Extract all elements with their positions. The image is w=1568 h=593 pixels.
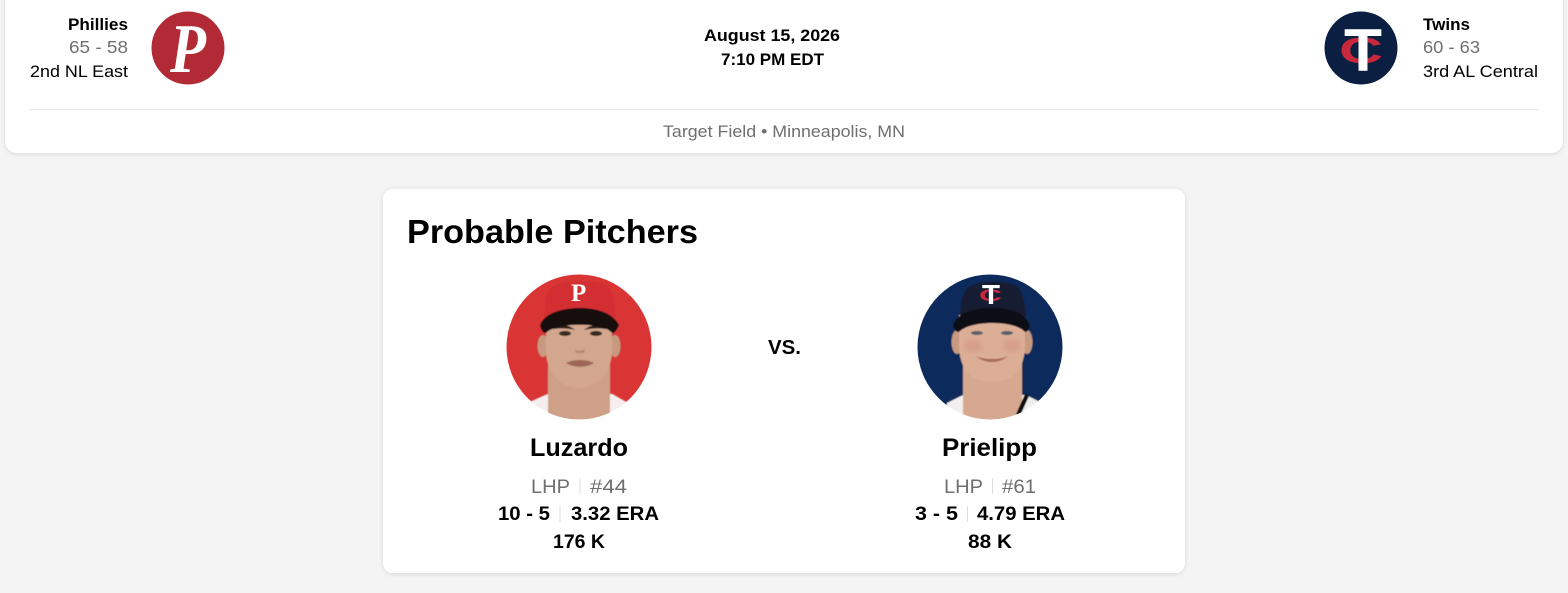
icon: Phillies logo: P [169,11,207,88]
pitcher details: Luzardo: 176 K [553,531,605,553]
pitcher details: Luzardo: Luzardo [530,434,628,462]
portrait: Prielipp: C [979,286,1002,305]
game date and time [704,26,840,69]
pitcher details: Prielipp: 4.79 ERA [977,503,1065,525]
pitcher details: Luzardo: 3.32 ERA [571,503,659,525]
away team: Phillies record: Phillies [68,16,128,34]
panel: game header card [5,0,1563,153]
icon: Phillies logo [152,11,224,88]
home team: Twins record: 60 - 63 [1423,37,1480,57]
game date and time: August 15, 2026 [704,26,840,45]
pitcher details: Prielipp [915,434,1065,553]
away team: Phillies record [30,16,128,81]
home team: Twins record: 3rd AL Central [1423,62,1538,81]
pitcher details: Luzardo: LHP [531,477,570,498]
away team: Phillies record: 65 - 58 [69,37,128,57]
pitcher details: Prielipp: 3 - 5 [915,503,958,525]
venue: Target Field • Minneapolis, MN [663,122,905,141]
pitcher details: Prielipp: Prielipp [942,434,1037,462]
portrait: Luzardo [506,274,652,420]
pitcher details: Luzardo: 10 - 5 [498,503,550,525]
home team: Twins record [1423,16,1538,81]
pitcher details: Luzardo [498,434,659,553]
portrait: Prielipp [918,274,1062,420]
icon: Twins logo: C [1339,30,1383,71]
away team: Phillies record: 2nd NL East [30,62,128,81]
pitcher details: Prielipp: LHP [944,477,983,498]
icon: Twins logo: T [1344,17,1382,84]
pitcher details: Prielipp: 88 K [968,531,1012,553]
pitcher details: Luzardo: #44 [590,477,628,498]
portrait: Luzardo: P [571,280,586,307]
portrait: Prielipp: T [982,279,1000,310]
pitcher details: Prielipp: #61 [1002,477,1036,498]
panel: probable pitchers card [383,189,1185,573]
icon: Twins logo [1324,12,1398,84]
versus label: VS. [768,337,801,359]
heading: Probable Pitchers [407,214,698,251]
home team: Twins record: Twins [1423,16,1470,34]
game date and time: 7:10 PM EDT [721,50,825,69]
